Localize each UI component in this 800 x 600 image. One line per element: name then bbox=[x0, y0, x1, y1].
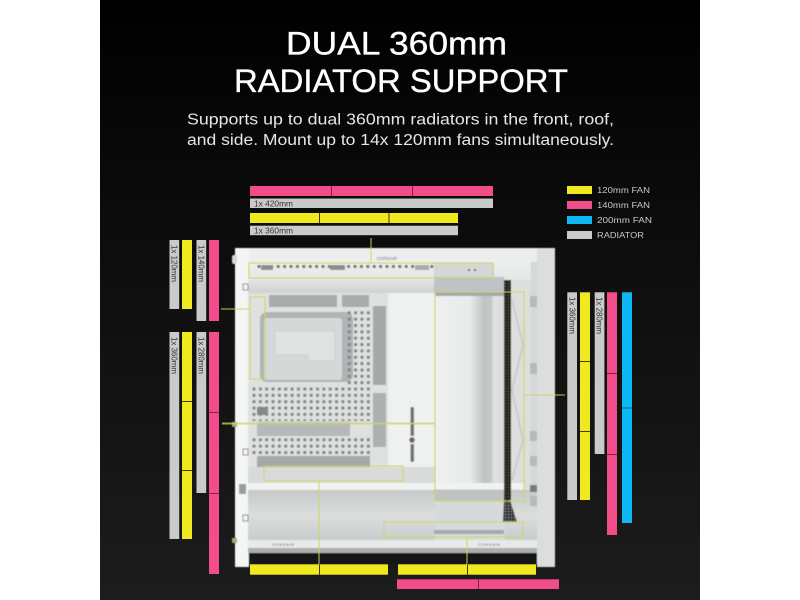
left mounting bars: lower bbox=[170, 332, 219, 574]
right rail brackets bbox=[530, 296, 537, 307]
side chamber bbox=[435, 292, 505, 484]
bottom mounting bars bbox=[250, 564, 559, 589]
cable mesh bbox=[504, 280, 511, 500]
bottom strip bbox=[248, 540, 537, 548]
left mounting bars: lower: 1x 360mm bbox=[170, 337, 180, 374]
case outer frame bbox=[235, 248, 555, 567]
brand mark: CORSAIR bbox=[377, 256, 398, 261]
left mounting bars: upper: 1x 140mm bbox=[196, 245, 206, 282]
PC case: CORSAIR bbox=[478, 542, 500, 547]
top interior bbox=[248, 262, 537, 293]
description text: Supports up to dual 360mm radiators in the front, roof, bbox=[187, 112, 614, 128]
PC case bbox=[232, 248, 555, 567]
right mounting bars bbox=[567, 292, 632, 535]
description text: and side. Mount up to 14x 120mm fans simultaneously. bbox=[187, 132, 614, 149]
middle panel bbox=[388, 293, 435, 467]
legend: 200mm FAN bbox=[597, 215, 652, 225]
left mounting bars: upper: 1x 120mm bbox=[170, 245, 180, 282]
lower chamber bbox=[248, 490, 537, 540]
legend: RADIATOR bbox=[597, 230, 644, 240]
title bbox=[234, 26, 568, 99]
perforated tray areas bbox=[345, 310, 372, 385]
cpu cutout bbox=[260, 312, 353, 382]
left mounting bars: upper bbox=[170, 240, 219, 321]
top mounting bars bbox=[250, 186, 493, 236]
left mounting bars: lower: 1x 280mm bbox=[196, 337, 206, 374]
slider control bbox=[410, 407, 414, 462]
description text bbox=[187, 112, 614, 149]
legend: 140mm FAN bbox=[597, 200, 650, 210]
top mounting bars: 1x 360mm bbox=[254, 226, 293, 236]
case screws bbox=[232, 255, 237, 264]
tray slots bbox=[373, 306, 386, 385]
right mounting bars: 1x 280mm bbox=[595, 297, 605, 334]
right mounting bars: 1x 360mm bbox=[567, 297, 577, 334]
right fan zone bbox=[511, 280, 531, 520]
legend: 120mm FAN bbox=[597, 185, 650, 195]
PC case: CORSAIR bbox=[272, 542, 294, 547]
top mounting bars: 1x 420mm bbox=[254, 198, 293, 208]
shroud divider bbox=[250, 483, 524, 490]
left rail details bbox=[243, 284, 248, 290]
title: DUAL 360mm bbox=[286, 26, 507, 62]
legend bbox=[567, 185, 652, 240]
motherboard tray bbox=[248, 293, 388, 467]
top vent strip bbox=[256, 265, 434, 270]
title: RADIATOR SUPPORT bbox=[234, 63, 568, 99]
background panel bbox=[100, 0, 700, 600]
radiator outlines and leader lines bbox=[221, 238, 565, 565]
